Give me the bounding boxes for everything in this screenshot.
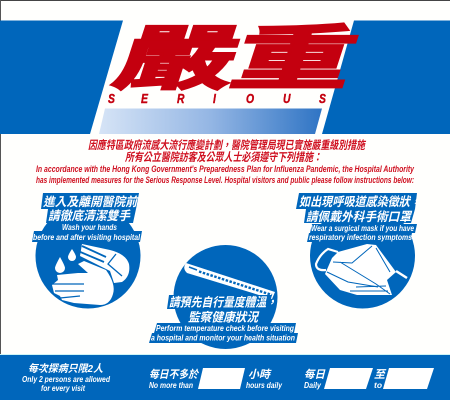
footer: daily visiting time: 每日 <box>304 368 326 381</box>
instruction: wear mask <box>296 193 421 308</box>
icon: surgical mask <box>310 204 415 308</box>
label: temperature check text: 監察健康狀況 <box>188 310 259 324</box>
title: English SERIOUS: S <box>108 92 115 106</box>
instruction: temperature check <box>149 245 298 349</box>
title: Chinese 嚴重 <box>105 21 368 98</box>
label: temperature check text: 請預先自行量度體溫， <box>169 296 277 310</box>
title: English SERIOUS: O <box>246 92 254 106</box>
footer: daily hours limit: 小時 <box>248 368 272 381</box>
intro text: 所有公立醫院訪客及公眾人士必須遵守下列措施： <box>125 151 322 164</box>
label: wash hands text: 進入及離開醫院前 <box>43 195 139 209</box>
title: English SERIOUS: U <box>283 92 291 106</box>
title: English SERIOUS: R <box>177 92 185 106</box>
title: Chinese 嚴重: 嚴 <box>105 21 251 98</box>
header band: right blue panel <box>322 20 450 134</box>
label: temperature check text <box>149 295 298 343</box>
footer: daily visiting time: to <box>374 380 382 390</box>
title: English SERIOUS: I <box>213 92 217 106</box>
header band: left blue panel <box>0 20 123 134</box>
footer: daily visiting time <box>304 368 434 390</box>
label: wear mask text <box>296 193 421 242</box>
instruction: wash hands <box>32 193 142 308</box>
footer: persons allowed <box>22 363 111 393</box>
label: wear mask text: 請佩戴外科手術口罩 <box>306 210 412 224</box>
label: wash hands text: 請徹底清潔雙手 <box>48 209 131 223</box>
footer: persons allowed: Only 2 persons are allowed <box>22 374 111 384</box>
footer: persons allowed: for every visit <box>41 383 86 393</box>
title: Chinese 嚴重: 重 <box>222 21 368 98</box>
label: wash hands text: before and after visiting hospital <box>33 232 141 242</box>
footer: daily hours limit: 每日不多於 <box>149 368 200 381</box>
label: wear mask text: respiratory infection symptoms <box>309 232 412 242</box>
label: temperature check text: a hospital and monitor your health situation <box>151 332 295 342</box>
icon: hand washing <box>36 204 140 308</box>
title: English SERIOUS: S <box>319 92 326 106</box>
footer: persons allowed: 每次探病只限2人 <box>28 363 103 375</box>
footer: daily hours limit: hours daily <box>246 380 283 390</box>
label: temperature check text: Perform temperature check before visiting <box>156 323 295 333</box>
footer: visiting rules <box>0 354 450 400</box>
footer: daily hours limit <box>149 368 283 390</box>
title: English SERIOUS: E <box>141 92 149 106</box>
footer: daily visiting time: 至 <box>374 369 387 381</box>
label: wash hands text: Wash your hands <box>62 222 117 232</box>
title: English SERIOUS <box>108 92 326 106</box>
icon: thermometer <box>174 245 278 349</box>
label: wear mask text: 如出現呼吸道感染徵狀， <box>299 195 421 209</box>
intro text: 因應特區政府流感大流行應變計劃，醫院管理局現已實施嚴重級別措施 <box>88 139 367 152</box>
intro text <box>36 139 415 185</box>
label: wash hands text <box>32 193 142 242</box>
label: wear mask text: Wear a surgical mask if you have <box>311 223 414 233</box>
header band: gradient strip <box>99 108 322 134</box>
footer: daily hours limit: No more than <box>149 380 193 390</box>
footer: daily visiting time: Daily <box>304 380 322 390</box>
